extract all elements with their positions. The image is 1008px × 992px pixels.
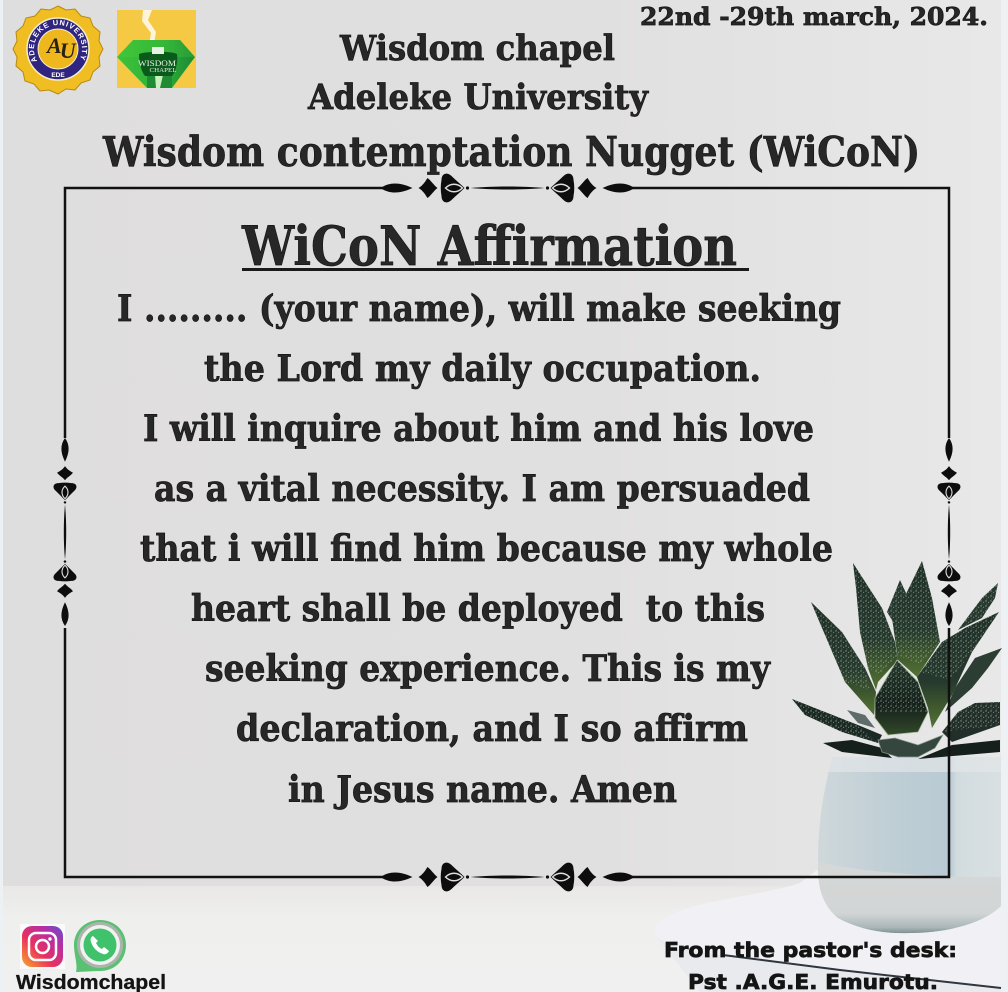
icon: whatsapp [74,920,126,972]
ornament: right [938,438,960,626]
affirmation text: declaration, and I so affirm [236,708,748,750]
icon: instagram [20,924,65,969]
heading: wisdom chapel: Wisdom chapel [339,28,615,69]
decorative frame [65,188,949,877]
affirmation text: the Lord my daily occupation. [204,348,761,390]
adeleke university seal: EDE [51,72,65,79]
book under plant [653,870,1001,992]
pastor credit [664,938,957,992]
wisdom chapel logo: WISDOM [138,59,176,68]
date: 22nd -29th march, 2024. [640,2,988,31]
ornament: top [380,174,634,202]
plant leaves [792,561,1002,759]
affirmation text: seeking experience. This is my [205,648,771,690]
affirmation text: as a vital necessity. I am persuaded [154,468,810,510]
affirmation text: I ......... (your name), will make seeking [117,288,841,330]
heading: adeleke university: Adeleke University [307,77,650,118]
affirmation text: heart shall be deployed to this [191,588,765,630]
adeleke university seal: U [60,38,77,63]
pastor credit: From the pastor's desk: [664,938,957,962]
adeleke university seal [12,6,104,95]
wisdom chapel logo [117,10,196,88]
affirmation text: that i will find him because my whole [140,528,833,570]
affirmation heading: WiCoN Affirmation [241,214,737,278]
heading: wicon title: Wisdom contemptation Nugget (WiCoN) [102,128,920,176]
affirmation text: in Jesus name. Amen [288,769,677,811]
affirmation text [117,288,841,811]
plant pot [818,757,1001,933]
adeleke university seal: A [47,33,62,58]
ornament: left [54,438,76,626]
adeleke university seal: ADELEKE UNIVERSITY [28,20,88,62]
ornament: bottom [380,863,634,891]
wisdom chapel logo: CHAPEL [150,68,177,74]
affirmation text: I will inquire about him and his love [143,408,814,450]
